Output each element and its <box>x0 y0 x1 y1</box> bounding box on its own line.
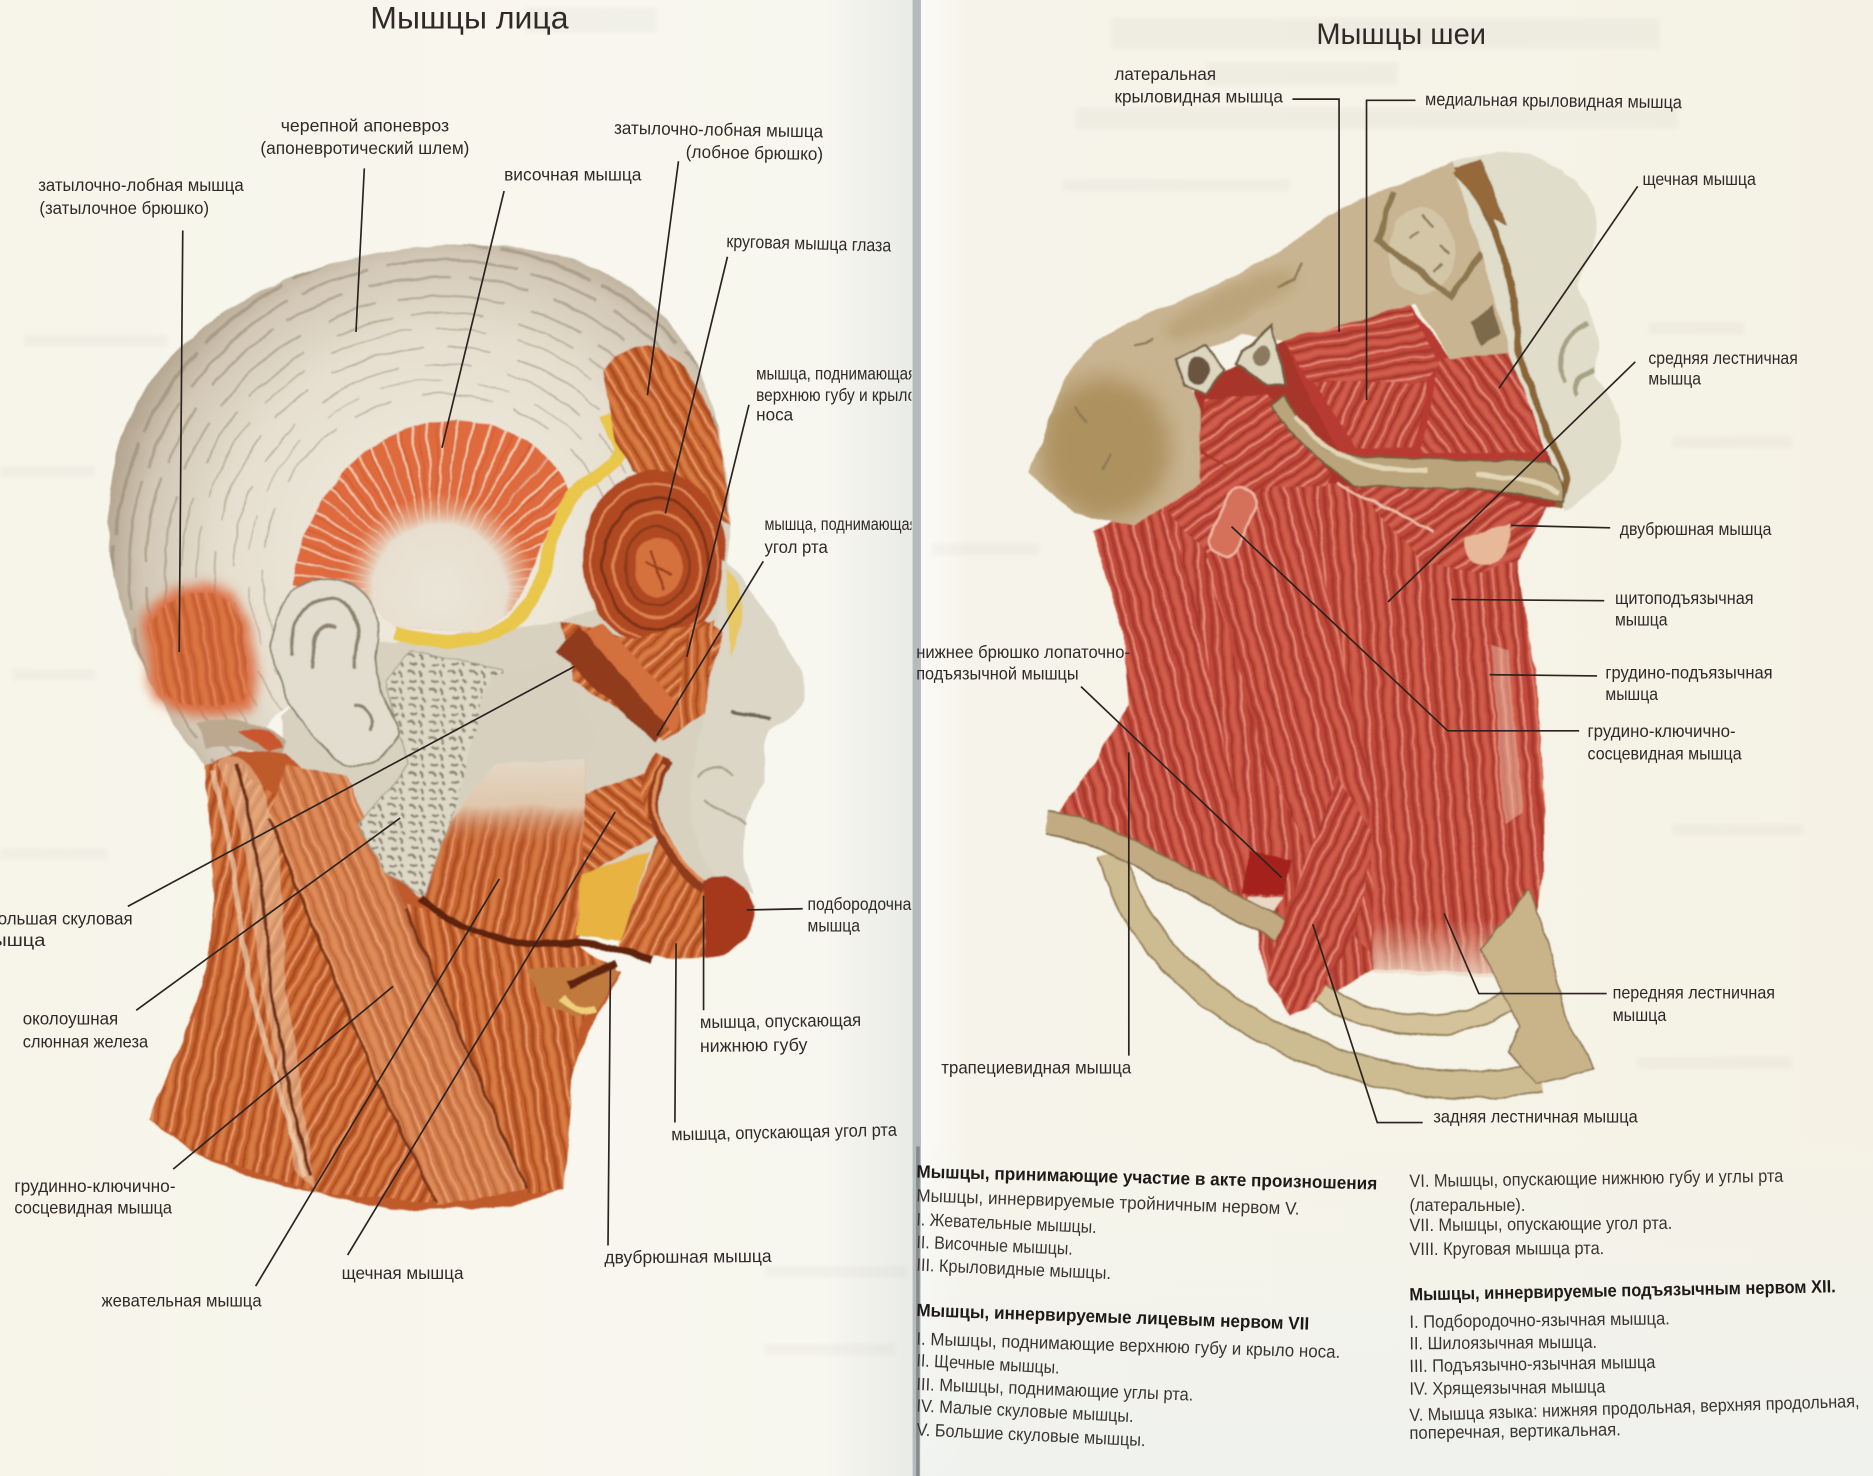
label: угол рта <box>657 514 917 736</box>
label: двубрюшная мышца: двубрюшная мышца <box>604 1246 772 1267</box>
deep muscle base under jaw <box>1183 340 1565 508</box>
list: facial nerve: V. Большие скуловые мышцы. <box>916 1419 1146 1450</box>
label: околоушная железа: околоушная <box>23 1009 118 1029</box>
label: задняя лестничная мышца: задняя лестничная мышца <box>1433 1107 1638 1127</box>
label: грудино-ключично-сосцевидная <box>1232 527 1742 763</box>
label: грудино-подъязычная <box>1490 662 1773 704</box>
label: черепной апоневроз: черепной апоневроз <box>281 115 449 135</box>
label: щечная мышца: щечная мышца <box>1642 169 1756 189</box>
label: грудино-ключично-сосцевидная: сосцевидная мышца <box>1588 743 1742 763</box>
label: околоушная железа <box>23 818 400 1051</box>
label: щитоподъязычная <box>1451 588 1754 630</box>
label: щечная мышца <box>342 812 615 1283</box>
label: двубрюшная мышца: двубрюшная мышца <box>1620 519 1771 539</box>
yellow buccal fat <box>576 850 651 940</box>
label: лобное брюшко <box>614 118 823 395</box>
list: trigeminal nerve <box>916 1185 1300 1283</box>
masseter <box>420 750 585 946</box>
heading: hypoglossal nerve: Мышцы, иннервируемые подъязычным нервом XII. <box>1409 1276 1836 1304</box>
list: hypoglossal nerve <box>1409 1308 1860 1443</box>
label: медиальная крыловидная <box>1367 89 1682 400</box>
label: верхнюю губу и крыло носа <box>687 364 916 657</box>
label: передняя лестничная: мышца <box>1613 1005 1666 1025</box>
text block: speech muscles, right column <box>1409 1166 1860 1443</box>
list: continued facial nerve <box>1409 1166 1783 1259</box>
text block: speech muscles, left column <box>916 1161 1378 1450</box>
label: грудинно-ключично-сосцевидная <box>14 986 393 1217</box>
label: подбородочная мышца: подбородочная <box>807 894 920 914</box>
book gutter <box>913 0 921 1476</box>
label: затылочное брюшко <box>38 175 244 652</box>
list: continued facial nerve: VII. Мышцы, опускающие угол рта. <box>1409 1213 1672 1235</box>
label: верхнюю губу и крыло носа: носа <box>756 404 793 424</box>
neck muscles <box>149 752 621 1211</box>
temporal muscle <box>292 418 569 632</box>
label: трапециевидная мышца: трапециевидная мышца <box>941 1058 1131 1078</box>
label: нижнее брюшко: подъязычной мышцы <box>916 663 1079 683</box>
manubrium <box>1481 890 1595 1083</box>
label: медиальная крыловидная: медиальная крыловидная мышца <box>1425 89 1682 112</box>
parotid gland <box>358 651 502 896</box>
label: круговая мышца глаза: круговая мышца глаза <box>726 231 891 256</box>
face mask tissue <box>1451 153 1621 511</box>
list: hypoglossal nerve: II. Шилоязычная мышца. <box>1409 1332 1597 1353</box>
neck muscle mass <box>1061 454 1547 1015</box>
list: continued facial nerve: VIII. Круговая мышца рта. <box>1409 1238 1604 1259</box>
label: височная мышца: височная мышца <box>504 164 641 184</box>
label: щитоподъязычная: мышца <box>1615 610 1668 630</box>
ear <box>272 579 400 767</box>
right page background <box>920 0 1873 1476</box>
list: facial nerve: III. Мышцы, поднимающие углы рта. <box>916 1374 1194 1405</box>
label: опускающая угол рта: мышца, опускающая угол рта <box>671 1120 897 1144</box>
list: trigeminal nerve: II. Височные мышцы. <box>916 1232 1073 1259</box>
yellow galea tendon <box>394 414 621 641</box>
list: facial nerve <box>916 1329 1341 1450</box>
label: опускающая нижнюю губу: нижнюю губу <box>700 1035 808 1056</box>
first rib outer <box>1111 854 1541 1085</box>
first rib inner <box>1320 994 1519 1025</box>
skull base bone <box>1027 161 1515 525</box>
label: затылочное брюшко: (затылочное брюшко) <box>39 198 209 218</box>
label: черепной апоневроз: (апоневротический шлем) <box>260 138 469 158</box>
clavicle <box>1048 823 1281 929</box>
zygomatic and levator bands <box>555 621 723 743</box>
label: латеральная крыловидная: латеральная <box>1114 64 1216 84</box>
list: hypoglossal nerve: I. Подбородочно-язычная мышца. <box>1409 1308 1670 1332</box>
label: околоушная железа: слюнная железа <box>23 1031 148 1051</box>
left page labels <box>0 1 920 1310</box>
label: верхнюю губу и крыло носа: мышца, поднимающая <box>756 364 916 384</box>
illustration: head with facial muscles <box>108 244 806 1211</box>
left page background <box>0 0 914 1476</box>
mandible cross-section <box>1175 325 1284 394</box>
label: подбородочная мышца <box>746 896 912 935</box>
list: trigeminal nerve: I. Жевательные мышцы. <box>916 1209 1097 1237</box>
list: facial nerve: IV. Малые скуловые мышцы. <box>916 1396 1134 1426</box>
list: trigeminal nerve: III. Крыловидные мышцы. <box>916 1255 1111 1283</box>
label: подбородочная мышца: мышца <box>807 915 860 935</box>
label: лобное брюшко: (лобное брюшко) <box>686 142 823 164</box>
label: грудино-подъязычная: грудино-подъязычная <box>1605 662 1773 682</box>
label: грудинно-ключично-сосцевидная: грудинно-ключично- <box>14 1176 176 1196</box>
label: латеральная крыловидная <box>1114 64 1339 332</box>
label: задняя лестничная мышца <box>1313 924 1638 1127</box>
list: hypoglossal nerve: IV. Хрящеязычная мышца <box>1409 1376 1605 1399</box>
label: круговая мышца глаза <box>665 231 891 513</box>
list: hypoglossal nerve: поперечная, вертикальная. <box>1409 1419 1621 1443</box>
heading: speech muscles: Мышцы, принимающие участие в акте произношения <box>916 1161 1378 1194</box>
face skin and nose <box>690 561 806 893</box>
label: опускающая нижнюю губу <box>700 896 861 1056</box>
right page labels <box>916 18 1798 1127</box>
label: средняя лестничная: мышца <box>1648 369 1701 389</box>
list: hypoglossal nerve: III. Подъязычно-язычная мышца <box>1409 1352 1656 1376</box>
label: угол рта: мышца, поднимающая <box>764 514 917 534</box>
label: щечная мышца: щечная мышца <box>342 1263 463 1283</box>
label: опускающая нижнюю губу: мышца, опускающая <box>700 1010 861 1032</box>
head base tissue <box>281 561 731 937</box>
frontal belly <box>603 346 729 525</box>
label: жевательная мышца <box>102 879 499 1310</box>
label: черепной апоневроз <box>260 115 469 332</box>
mandible strip <box>1271 395 1564 502</box>
pale zygomatic tissue <box>454 663 597 812</box>
list: continued facial nerve: (латеральные). <box>1410 1195 1525 1215</box>
label: верхнюю губу и крыло носа: верхнюю губу и крыло <box>756 385 916 405</box>
label: нижнее брюшко: нижнее брюшко лопаточно- <box>916 642 1130 662</box>
jawline and digastric <box>420 898 651 1017</box>
label: щечная мышца <box>1499 169 1756 388</box>
label: щитоподъязычная: щитоподъязычная <box>1615 588 1754 608</box>
label: передняя лестничная: передняя лестничная <box>1613 982 1775 1002</box>
buccinator <box>582 770 655 878</box>
orbicularis oculi <box>583 471 726 645</box>
label: большая скуловая <box>0 666 575 950</box>
list: continued facial nerve: VI. Мышцы, опускающие нижнюю губу и углы рта <box>1409 1166 1783 1191</box>
label: жевательная мышца: жевательная мышца <box>102 1290 262 1310</box>
label: грудинно-ключично-сосцевидная: сосцевидная мышца <box>14 1197 172 1217</box>
label: угол рта: угол рта <box>764 537 828 557</box>
label: средняя лестничная: средняя лестничная <box>1648 348 1798 368</box>
label: грудино-подъязычная: мышца <box>1605 684 1658 704</box>
label: лобное брюшко: затылочно-лобная мышца <box>614 118 823 141</box>
title: Мышцы шеи: Мышцы шеи <box>1316 18 1486 51</box>
label: височная мышца <box>442 164 641 448</box>
scalp aponeurosis <box>106 243 731 766</box>
list: facial nerve: I. Мышцы, поднимающие верхнюю губу и крыло носа. <box>916 1329 1341 1362</box>
heading: facial nerve: Мышцы, иннервируемые лицевым нервом VII <box>916 1300 1310 1334</box>
orbicularis oris and chin muscles <box>619 752 755 959</box>
label: грудино-ключично-сосцевидная: грудино-ключично- <box>1588 721 1736 741</box>
pterygoid and buccal muscles <box>1195 305 1547 487</box>
illustration: neck muscles <box>1027 153 1621 1085</box>
list: trigeminal nerve: Мышцы, иннервируемые тройничным нервом V. <box>916 1185 1300 1219</box>
title: Мышцы лица: Мышцы лица <box>370 1 569 36</box>
label: передняя лестничная <box>1444 914 1775 1025</box>
label: средняя лестничная <box>1388 348 1798 602</box>
label: затылочное брюшко: затылочно-лобная мышца <box>38 175 244 195</box>
label: нижнее брюшко <box>916 642 1282 878</box>
label: латеральная крыловидная: крыловидная мышца <box>1114 87 1283 107</box>
occipital belly <box>141 585 287 770</box>
list: facial nerve: II. Щечные мышцы. <box>916 1350 1060 1378</box>
